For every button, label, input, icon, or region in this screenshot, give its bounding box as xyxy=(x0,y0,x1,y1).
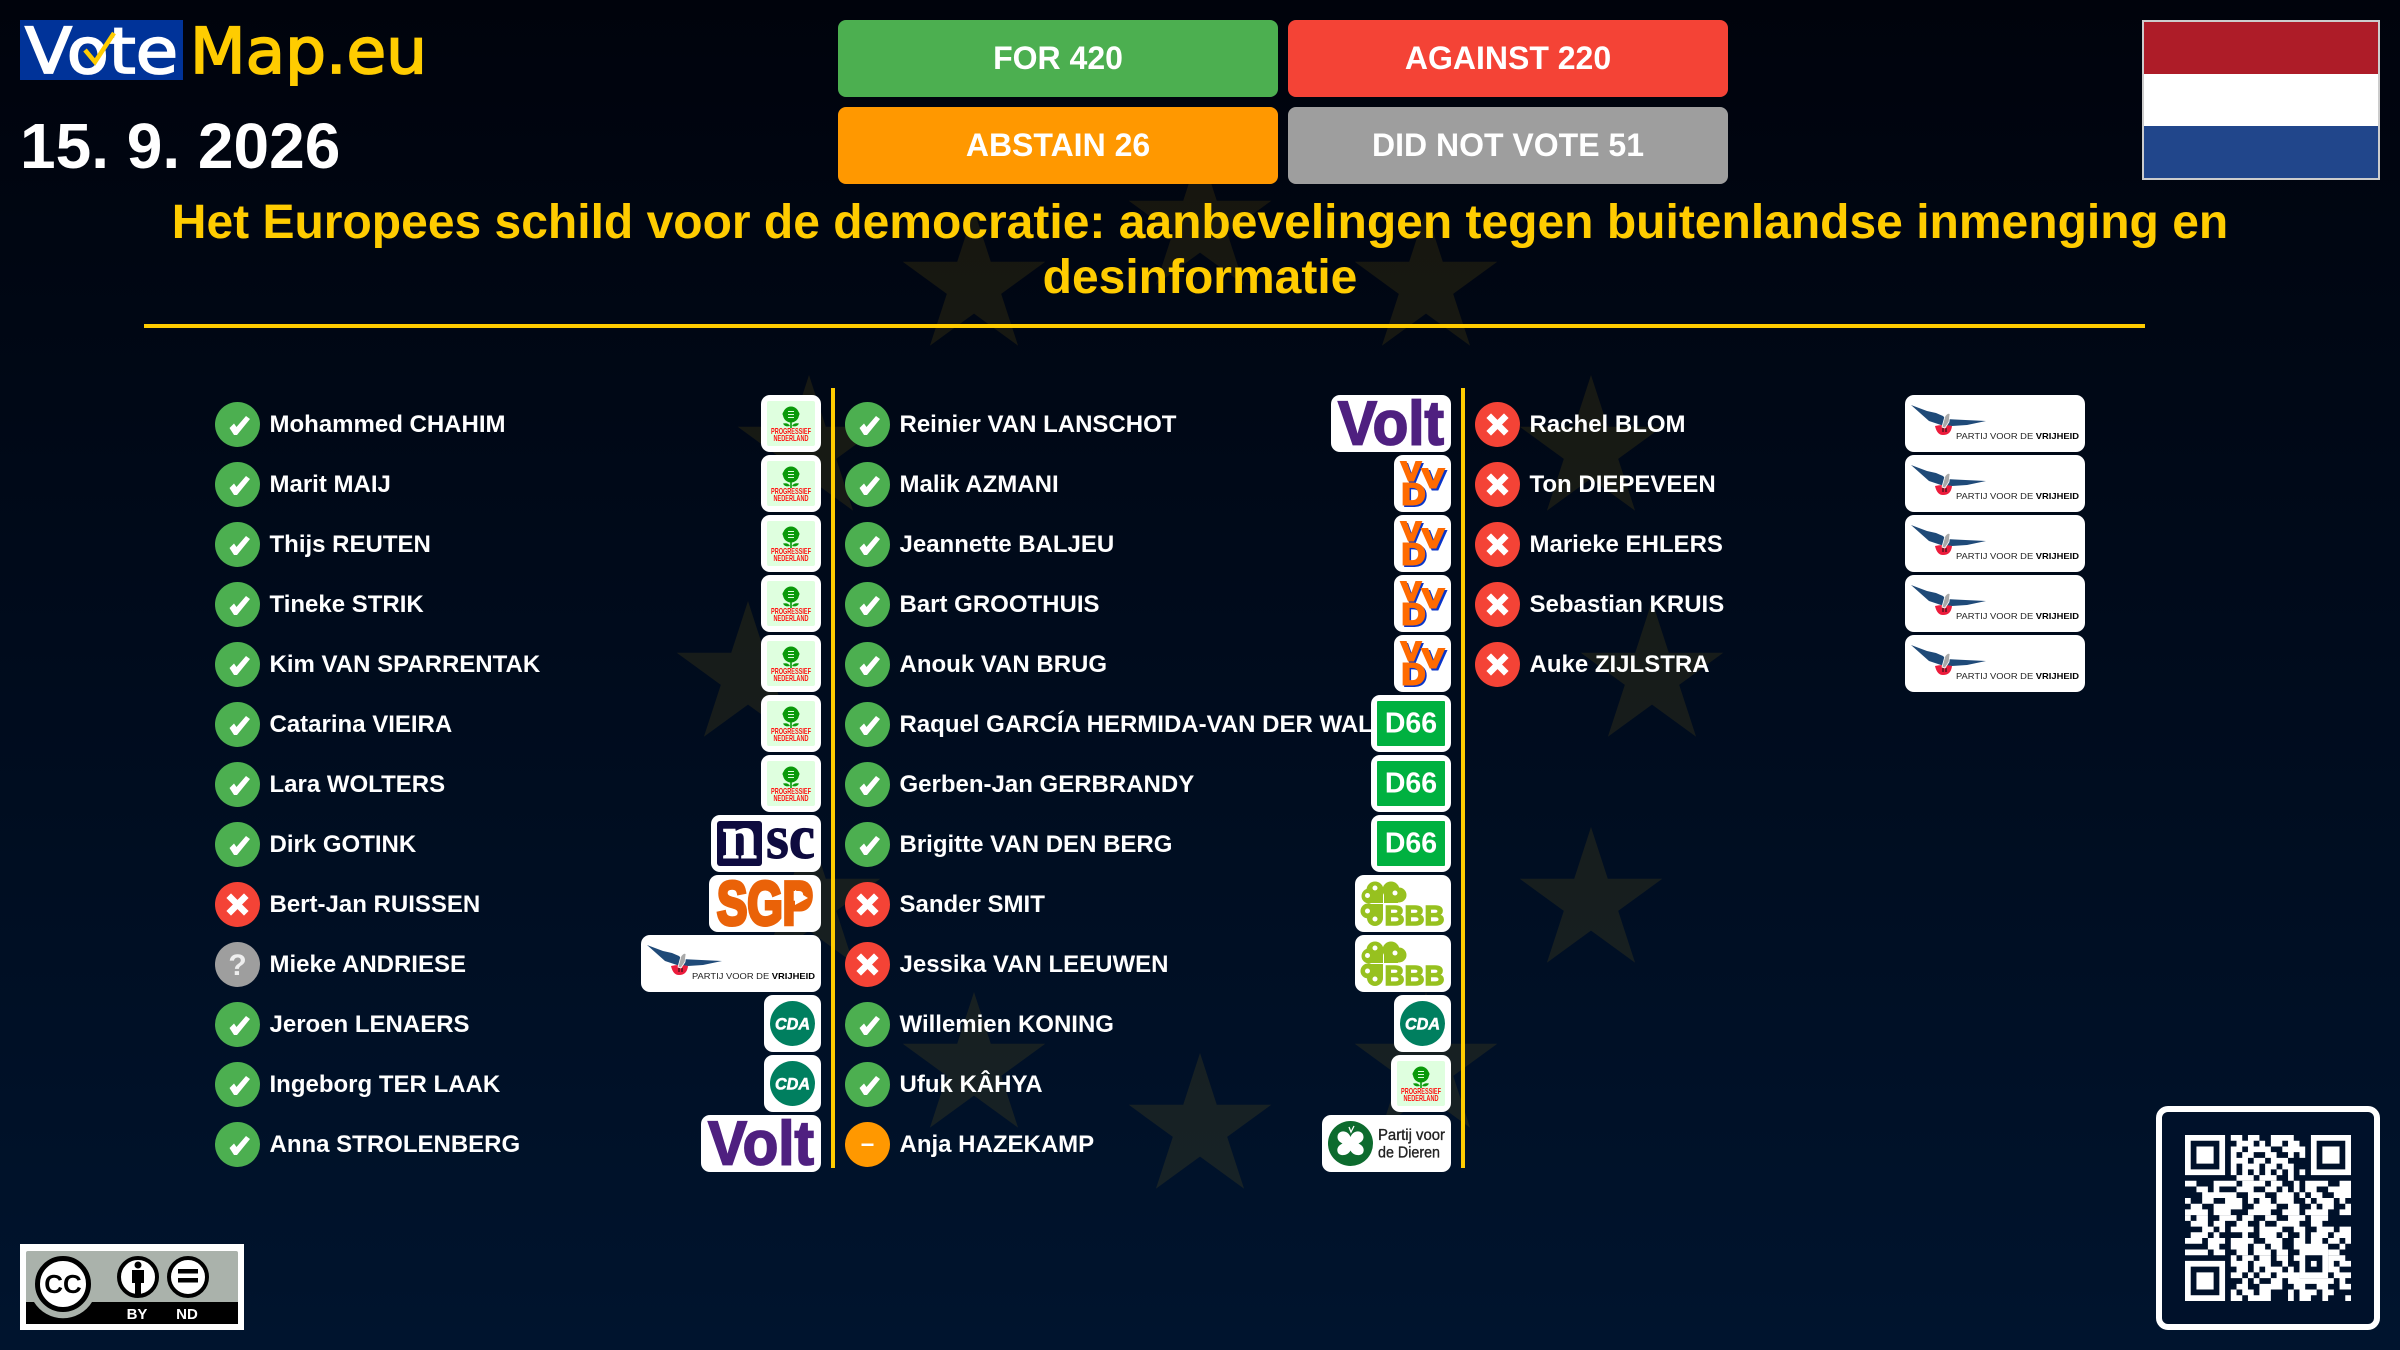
icon: against xyxy=(1475,462,1520,507)
party logo: VVD: V xyxy=(1402,458,1422,488)
party logo: VVD: D xyxy=(1402,656,1425,692)
party logo: Partij voor de Dieren: de Dieren xyxy=(1378,1144,1440,1162)
icon: for xyxy=(215,462,260,507)
name: Jeannette BALJEU xyxy=(900,531,1114,558)
party logo: Progressief Nederland xyxy=(1391,1055,1451,1112)
icon: for xyxy=(215,522,260,567)
party logo: VVD: V xyxy=(1401,576,1421,606)
name: Bart GROOTHUIS xyxy=(900,591,1100,618)
party logo: CDA xyxy=(764,1055,821,1112)
icon: against xyxy=(845,882,890,927)
name: Thijs REUTEN xyxy=(270,531,431,558)
icon: against xyxy=(1475,642,1520,687)
icon: against xyxy=(1475,522,1520,567)
icon: for xyxy=(845,522,890,567)
row: Sander SMIT xyxy=(845,875,1451,932)
total: did not vote xyxy=(1288,107,1728,184)
title underline xyxy=(144,324,2145,328)
party logo: VVD: D xyxy=(1403,538,1427,572)
party logo: D66: D66 xyxy=(1385,708,1437,740)
logo: VoteMap.eu xyxy=(20,20,427,86)
column divider 1 xyxy=(831,388,835,1168)
column 1 xyxy=(215,395,821,1172)
row: Rachel BLOM xyxy=(1475,395,2085,452)
party logo: VVD: V xyxy=(1401,516,1421,546)
party logo: PVV xyxy=(1905,575,2085,632)
party logo: CDA: CDA xyxy=(775,1074,810,1094)
party logo: Progressief Nederland xyxy=(761,755,821,812)
vote totals xyxy=(838,20,1728,184)
icon: against xyxy=(1475,582,1520,627)
party logo: D66: D66 xyxy=(1385,768,1437,800)
name: Brigitte VAN DEN BERG xyxy=(900,831,1172,858)
row: Marieke EHLERS xyxy=(1475,515,2085,572)
row: Bart GROOTHUIS xyxy=(845,575,1451,632)
party logo: CDA xyxy=(764,995,821,1052)
party logo: CDA: CDA xyxy=(775,1014,810,1034)
row: Ton DIEPEVEEN xyxy=(1475,455,2085,512)
total: did not vote: DID NOT VOTE 51 xyxy=(1372,127,1644,163)
icon: for xyxy=(845,1002,890,1047)
party logo: VVD xyxy=(1394,575,1451,632)
title: Het Europees schild voor de democratie: aanbevelingen tegen buitenlandse inmenging en xyxy=(172,196,2228,249)
row: Mieke ANDRIESE xyxy=(215,935,821,992)
row: Mohammed CHAHIM xyxy=(215,395,821,452)
party logo: D66 xyxy=(1371,695,1451,752)
party logo: VVD: V xyxy=(1422,584,1444,614)
party logo: Progressief Nederland xyxy=(761,395,821,452)
row: Thijs REUTEN xyxy=(215,515,821,572)
party logo: VVD xyxy=(1394,635,1451,692)
row: Tineke STRIK xyxy=(215,575,821,632)
party logo: PVV: PARTIJ VOOR DE VRIJHEID xyxy=(1956,671,2079,681)
row: Jeroen LENAERS xyxy=(215,995,821,1052)
row: Auke ZIJLSTRA xyxy=(1475,635,2085,692)
name: Mieke ANDRIESE xyxy=(270,951,466,978)
party logo: VVD: D xyxy=(1402,596,1425,632)
icon: against xyxy=(215,882,260,927)
name: Jessika VAN LEEUWEN xyxy=(900,951,1168,978)
icon: for xyxy=(215,702,260,747)
total: abstain: ABSTAIN 26 xyxy=(966,127,1150,163)
column divider 2 xyxy=(1461,388,1465,1168)
name: Anouk VAN BRUG xyxy=(900,651,1107,678)
party logo: VVD: D xyxy=(1402,536,1425,572)
name: Reinier VAN LANSCHOT xyxy=(900,411,1176,438)
party logo: PVV: PARTIJ VOOR DE VRIJHEID xyxy=(1956,431,2079,441)
row: Willemien KONING xyxy=(845,995,1451,1052)
icon: for xyxy=(845,762,890,807)
name: Marieke EHLERS xyxy=(1530,531,1723,558)
party logo: PVV: PARTIJ VOOR DE VRIJHEID xyxy=(692,971,815,981)
row: Marit MAIJ xyxy=(215,455,821,512)
party logo: CDA: CDA xyxy=(1405,1014,1440,1034)
party logo: VVD: D xyxy=(1403,598,1427,632)
party logo: BBB xyxy=(1355,935,1451,992)
icon: abstain xyxy=(845,1122,890,1167)
party logo: PVV xyxy=(1905,635,2085,692)
name: Raquel GARCÍA HERMIDA-VAN DER WAL xyxy=(900,711,1373,738)
party logo: PVV: PARTIJ VOOR DE VRIJHEID xyxy=(1956,491,2079,501)
name: Bert-Jan RUISSEN xyxy=(270,891,480,918)
party logo: NSC xyxy=(711,815,821,872)
row: Kim VAN SPARRENTAK xyxy=(215,635,821,692)
party logo: VVD: D xyxy=(1402,476,1425,512)
name: Lara WOLTERS xyxy=(270,771,445,798)
icon: for xyxy=(845,582,890,627)
title: desinformatie xyxy=(1043,251,1357,304)
party logo: PVV xyxy=(1905,455,2085,512)
name: Ingeborg TER LAAK xyxy=(270,1071,500,1098)
name: Gerben-Jan GERBRANDY xyxy=(900,771,1194,798)
party logo: BBB xyxy=(1355,875,1451,932)
party logo: Progressief Nederland xyxy=(761,575,821,632)
name: Sander SMIT xyxy=(900,891,1045,918)
party logo: VVD: V xyxy=(1401,636,1421,666)
party logo: Progressief Nederland xyxy=(761,515,821,572)
name: Jeroen LENAERS xyxy=(270,1011,470,1038)
party logo: Partij voor de Dieren xyxy=(1322,1115,1451,1172)
party logo: VVD: V xyxy=(1402,578,1422,608)
date: 15. 9. 2026 xyxy=(20,110,340,182)
total: for: FOR 420 xyxy=(993,40,1123,76)
name: Malik AZMANI xyxy=(900,471,1059,498)
party logo: VVD: V xyxy=(1402,518,1422,548)
title xyxy=(172,196,2228,304)
row: Malik AZMANI xyxy=(845,455,1451,512)
party logo: Progressief Nederland xyxy=(761,635,821,692)
QR code xyxy=(2156,1106,2380,1330)
total: against: AGAINST 220 xyxy=(1405,40,1611,76)
column 2 xyxy=(845,395,1451,1172)
icon: for xyxy=(215,762,260,807)
name: Anna STROLENBERG xyxy=(270,1131,520,1158)
licence badge: CC BY-ND: CC xyxy=(44,1269,82,1299)
party logo: VVD: D xyxy=(1403,478,1427,512)
party logo: CDA xyxy=(1394,995,1451,1052)
row: Jessika VAN LEEUWEN xyxy=(845,935,1451,992)
icon: for xyxy=(845,822,890,867)
total: abstain xyxy=(838,107,1278,184)
row: Bert-Jan RUISSEN xyxy=(215,875,821,932)
row: Jeannette BALJEU xyxy=(845,515,1451,572)
name: Mohammed CHAHIM xyxy=(270,411,506,438)
icon: for xyxy=(215,822,260,867)
flag: Netherlands xyxy=(2142,20,2380,180)
licence badge: CC BY-ND: ND xyxy=(176,1306,198,1323)
total: against xyxy=(1288,20,1728,97)
total: for xyxy=(838,20,1278,97)
party logo: VVD: V xyxy=(1422,644,1444,674)
row: Catarina VIEIRA xyxy=(215,695,821,752)
icon: for xyxy=(215,1002,260,1047)
icon: for xyxy=(215,642,260,687)
name: Marit MAIJ xyxy=(270,471,391,498)
party logo: VVD: D xyxy=(1403,658,1427,692)
row: Ingeborg TER LAAK xyxy=(215,1055,821,1112)
icon: for xyxy=(215,1062,260,1107)
name: Rachel BLOM xyxy=(1530,411,1686,438)
icon: for xyxy=(215,1122,260,1167)
column 3 xyxy=(1475,395,2085,692)
party logo: VVD: V xyxy=(1402,638,1422,668)
name: Tineke STRIK xyxy=(270,591,424,618)
party logo: PVV: PARTIJ VOOR DE VRIJHEID xyxy=(1956,551,2079,561)
party logo: VVD: V xyxy=(1424,586,1446,616)
icon: for xyxy=(845,1062,890,1107)
icon: against xyxy=(1475,402,1520,447)
icon: for xyxy=(215,582,260,627)
party logo: VVD xyxy=(1394,515,1451,572)
party logo: PVV xyxy=(1905,515,2085,572)
row: Dirk GOTINK xyxy=(215,815,821,872)
icon: for xyxy=(845,642,890,687)
name: Ufuk KÂHYA xyxy=(900,1071,1043,1098)
party logo: VVD: V xyxy=(1424,646,1446,676)
party logo: VVD: V xyxy=(1424,466,1446,496)
row: Ufuk KÂHYA xyxy=(845,1055,1451,1112)
icon: for xyxy=(845,462,890,507)
party logo: VVD: V xyxy=(1422,524,1444,554)
party logo: PVV xyxy=(641,935,821,992)
row: Reinier VAN LANSCHOT xyxy=(845,395,1451,452)
party logo: PVV: PARTIJ VOOR DE VRIJHEID xyxy=(1956,611,2079,621)
icon: for xyxy=(845,402,890,447)
party logo: VVD xyxy=(1394,455,1451,512)
party logo: VVD: V xyxy=(1401,456,1421,486)
name: Auke ZIJLSTRA xyxy=(1530,651,1710,678)
icon: did not vote xyxy=(215,942,260,987)
name: Catarina VIEIRA xyxy=(270,711,452,738)
name: Kim VAN SPARRENTAK xyxy=(270,651,540,678)
licence badge: CC BY-ND xyxy=(20,1244,244,1330)
name: Ton DIEPEVEEN xyxy=(1530,471,1716,498)
row: Anna STROLENBERG xyxy=(215,1115,821,1172)
name: Anja HAZEKAMP xyxy=(900,1131,1094,1158)
icon: for xyxy=(845,702,890,747)
party logo: Progressief Nederland xyxy=(761,695,821,752)
party logo: BBB: BBB xyxy=(1384,960,1444,991)
row: Sebastian KRUIS xyxy=(1475,575,2085,632)
name: Sebastian KRUIS xyxy=(1530,591,1724,618)
icon: for xyxy=(215,402,260,447)
row: Anja HAZEKAMP xyxy=(845,1115,1451,1172)
party logo: D66 xyxy=(1371,815,1451,872)
icon: did not vote: ? xyxy=(228,949,247,982)
party logo: BBB: BBB xyxy=(1384,900,1444,931)
licence badge: CC BY-ND: BY xyxy=(127,1306,147,1323)
row: Gerben-Jan GERBRANDY xyxy=(845,755,1451,812)
row: Lara WOLTERS xyxy=(215,755,821,812)
name: Dirk GOTINK xyxy=(270,831,416,858)
party logo: PVV xyxy=(1905,395,2085,452)
row: Raquel GARCÍA HERMIDA-VAN DER WAL xyxy=(845,695,1451,752)
party logo: Progressief Nederland xyxy=(761,455,821,512)
icon: against xyxy=(845,942,890,987)
party logo: Partij voor de Dieren: Partij voor xyxy=(1378,1127,1445,1144)
party logo: D66: D66 xyxy=(1385,828,1437,860)
row: Brigitte VAN DEN BERG xyxy=(845,815,1451,872)
party logo: VVD: V xyxy=(1424,526,1446,556)
party logo: VVD: V xyxy=(1422,464,1444,494)
name: Willemien KONING xyxy=(900,1011,1114,1038)
row: Anouk VAN BRUG xyxy=(845,635,1451,692)
party logo: D66 xyxy=(1371,755,1451,812)
